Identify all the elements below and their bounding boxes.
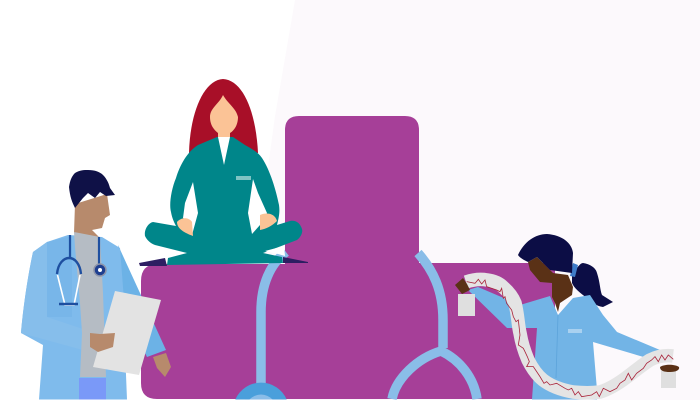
face and neck bbox=[210, 95, 238, 141]
wedge gap bbox=[265, 246, 285, 256]
purple stepped block bbox=[141, 116, 555, 399]
hair bbox=[518, 234, 573, 273]
background panel bbox=[245, 0, 700, 400]
ponytail bbox=[572, 263, 613, 307]
coat shaded panel bbox=[47, 236, 72, 317]
shoes bbox=[139, 258, 167, 266]
neck and face bbox=[528, 257, 573, 312]
doctor with clipboard bbox=[21, 170, 171, 400]
shirt bbox=[74, 232, 106, 377]
hair tie bbox=[570, 263, 578, 277]
hair bbox=[189, 79, 258, 153]
tag left bbox=[458, 294, 475, 316]
hair bbox=[69, 170, 115, 208]
badge bbox=[568, 329, 582, 333]
arm gap right bbox=[248, 179, 267, 234]
scrub top bbox=[508, 295, 660, 400]
ecg trace bbox=[467, 279, 673, 397]
tag right bbox=[661, 371, 676, 388]
meditating doctor bbox=[139, 79, 308, 266]
badge bbox=[236, 176, 251, 180]
stethoscope tubes bbox=[261, 252, 477, 399]
technician holding ECG strip bbox=[455, 234, 679, 400]
stethoscope chest piece bbox=[235, 383, 287, 400]
scrubs bbox=[145, 137, 302, 265]
stethoscope around neck bbox=[57, 235, 106, 305]
arm gap left bbox=[183, 182, 198, 235]
hands bbox=[177, 218, 193, 236]
neck and face bbox=[74, 194, 110, 238]
hands bbox=[455, 278, 470, 294]
left arm bbox=[468, 287, 537, 328]
lab coat bbox=[21, 235, 127, 400]
far sleeve bbox=[118, 245, 166, 357]
coat arm bbox=[21, 242, 92, 352]
trousers bbox=[79, 378, 106, 400]
undershirt bbox=[218, 137, 230, 165]
paper strip bbox=[466, 279, 673, 393]
paper bbox=[93, 291, 161, 375]
hands bbox=[90, 333, 115, 352]
scrub seam bbox=[556, 315, 558, 378]
